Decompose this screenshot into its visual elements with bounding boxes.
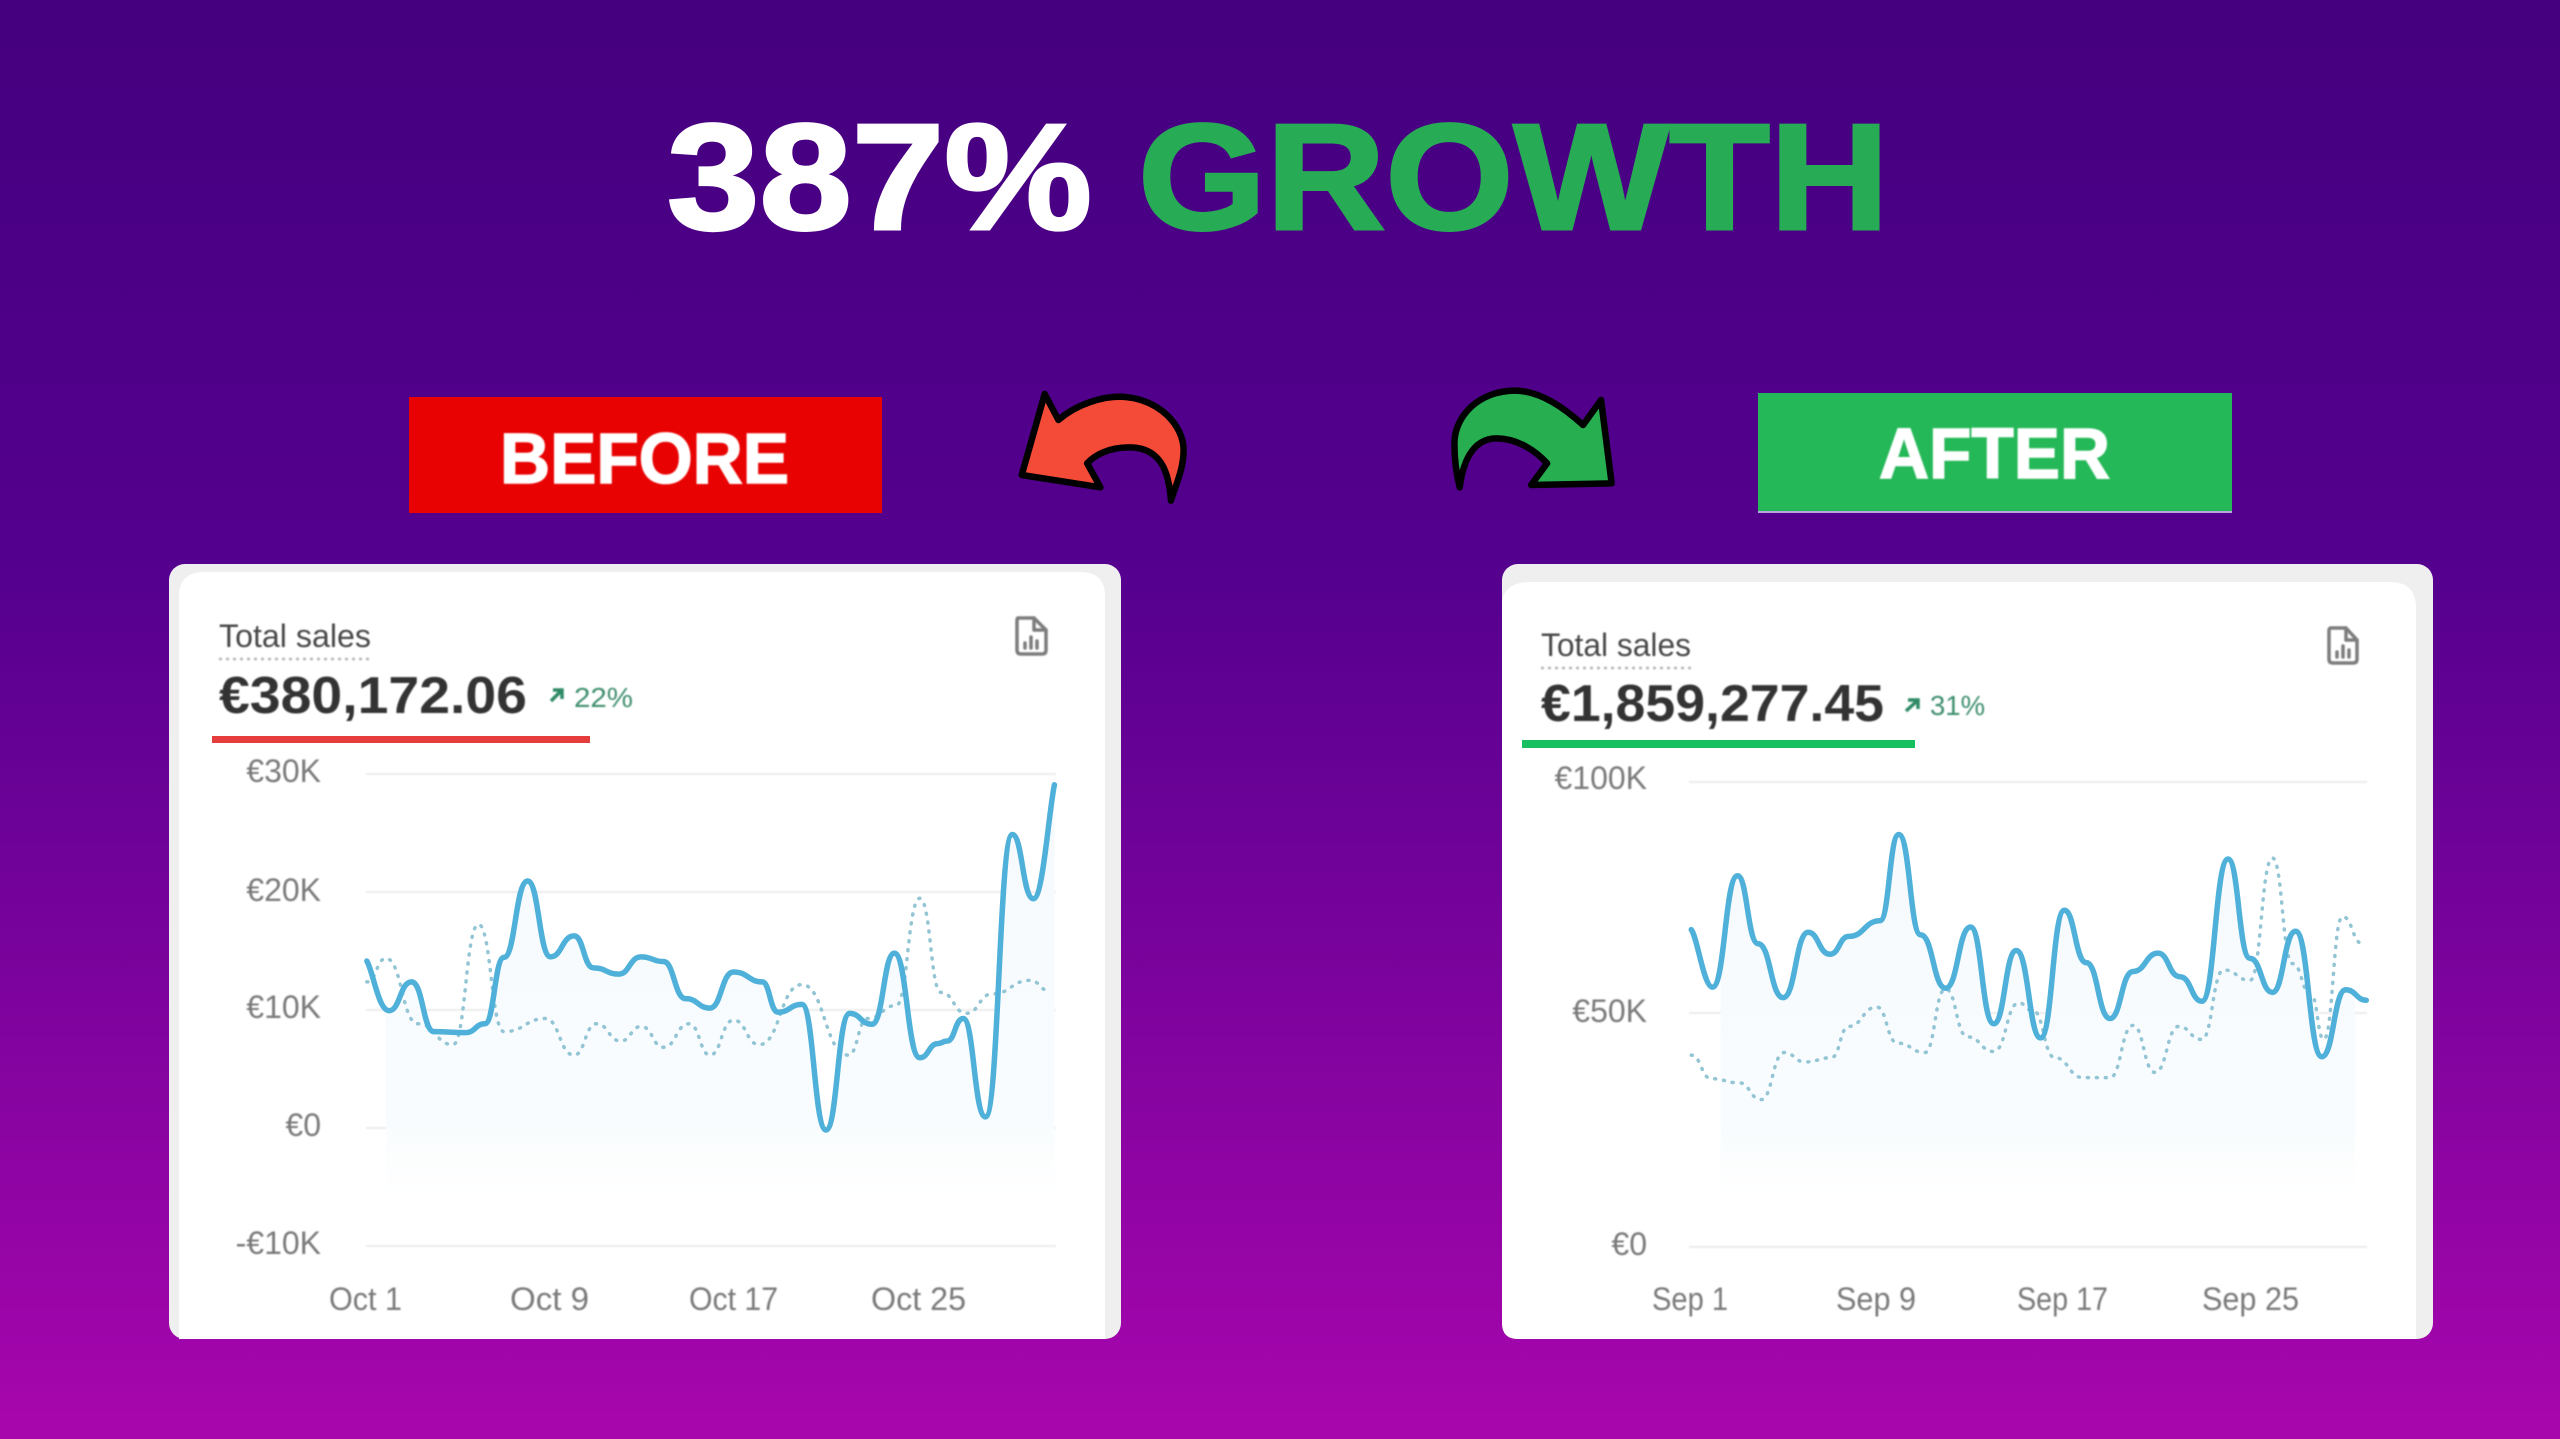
red underline <box>212 736 590 743</box>
before chart: grid and axis labels: Oct 17 <box>689 1281 778 1317</box>
icon: report document <box>1017 618 1046 654</box>
icon: green arrow pointing to after <box>1454 391 1612 487</box>
after chart: grid and axis labels: €50K <box>1572 993 1647 1029</box>
green underline <box>1522 740 1915 748</box>
title <box>667 92 1889 261</box>
after badge <box>1758 393 2232 513</box>
panel: after sales card <box>1502 564 2433 1339</box>
after chart: grid and axis labels: Sep 1 <box>1652 1281 1728 1317</box>
after chart: grid and axis labels <box>1554 760 2367 1317</box>
before chart: grid and axis labels: Oct 9 <box>510 1281 589 1317</box>
after chart: total sales label: Total sales <box>1541 627 1691 663</box>
after chart: sales line chart <box>1688 832 2369 1102</box>
before chart: total amount: €380,172.06 <box>219 667 527 725</box>
after badge: AFTER <box>1879 415 2110 494</box>
after chart: grid and axis labels: Sep 25 <box>2202 1281 2299 1317</box>
panel: before sales card <box>169 564 1121 1339</box>
before chart: sales line chart <box>364 782 1058 1133</box>
before chart: total sales label: Total sales <box>219 618 371 654</box>
before chart: grid and axis labels: €10K <box>246 989 321 1025</box>
after chart: grid and axis labels: Sep 17 <box>2017 1281 2108 1317</box>
after chart: change indicator: 31% <box>1930 690 1985 721</box>
before chart: grid and axis labels <box>236 753 1056 1317</box>
before chart: grid and axis labels: €30K <box>246 753 321 789</box>
icon: report document <box>2329 628 2357 663</box>
title: 387% <box>667 92 1092 261</box>
before chart: grid and axis labels: €20K <box>246 872 321 908</box>
before badge: BEFORE <box>500 420 789 499</box>
before chart: grid and axis labels: Oct 25 <box>871 1281 966 1317</box>
icon: red arrow pointing to before <box>1022 394 1184 501</box>
before badge <box>409 397 882 513</box>
before chart: change indicator <box>551 682 633 713</box>
after chart: change indicator <box>1906 690 1985 721</box>
before chart: grid and axis labels: Oct 1 <box>329 1281 402 1317</box>
before chart: change indicator: 22% <box>574 682 633 713</box>
after chart: total amount: €1,859,277.45 <box>1541 675 1884 733</box>
after chart: grid and axis labels: €0 <box>1611 1226 1647 1262</box>
after chart: grid and axis labels: €100K <box>1554 760 1647 796</box>
after chart: grid and axis labels: Sep 9 <box>1836 1281 1916 1317</box>
title: GROWTH <box>1138 92 1889 261</box>
before chart: grid and axis labels: €0 <box>285 1107 321 1143</box>
before chart: grid and axis labels: -€10K <box>236 1225 321 1261</box>
